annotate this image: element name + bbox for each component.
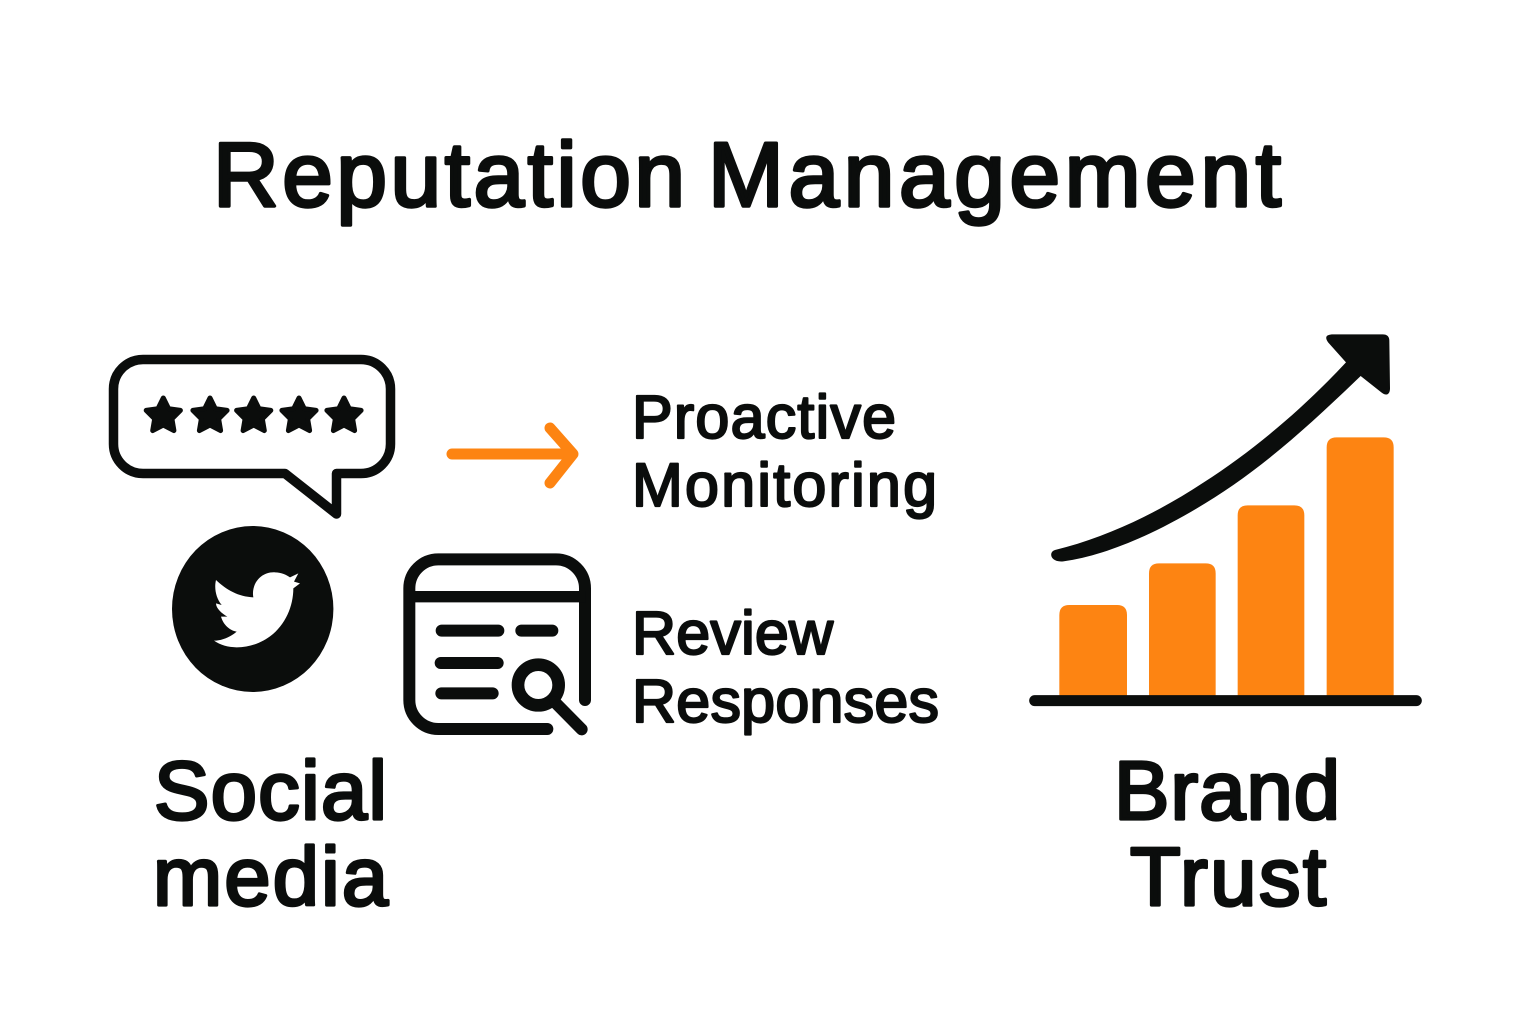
white bird [214, 572, 300, 647]
icon: document with magnifying glass [409, 559, 586, 729]
arrow: orange [452, 428, 573, 483]
label: social media: media [153, 830, 389, 923]
label: social media: Social [154, 744, 387, 837]
title: Reputation [213, 125, 685, 226]
header divider [409, 580, 586, 614]
label: brand trust [1114, 744, 1340, 923]
magnifying glass [518, 665, 582, 729]
chart: rising orange bars with arrow [1035, 334, 1416, 701]
title: Management [708, 125, 1281, 226]
label: proactive monitoring: Proactive [632, 383, 896, 451]
icon: bird in black circle [172, 526, 333, 692]
text lines [441, 631, 552, 693]
speech bubble outline [114, 360, 390, 514]
window frame [409, 559, 585, 729]
label: review responses [632, 599, 939, 735]
five stars [146, 398, 361, 431]
label: brand trust: Brand [1114, 744, 1340, 837]
growth arrow [1051, 334, 1390, 561]
label: review responses: Review [632, 599, 834, 667]
title [213, 125, 1281, 226]
black circle [172, 526, 333, 692]
icon: review speech bubble with five stars [114, 360, 390, 514]
label: brand trust: Trust [1130, 830, 1326, 923]
baseline [1035, 684, 1416, 717]
label: proactive monitoring [632, 383, 937, 519]
label: proactive monitoring: Monitoring [632, 451, 937, 519]
bars [1059, 437, 1394, 698]
label: social media [153, 744, 389, 923]
label: review responses: Responses [632, 667, 939, 735]
